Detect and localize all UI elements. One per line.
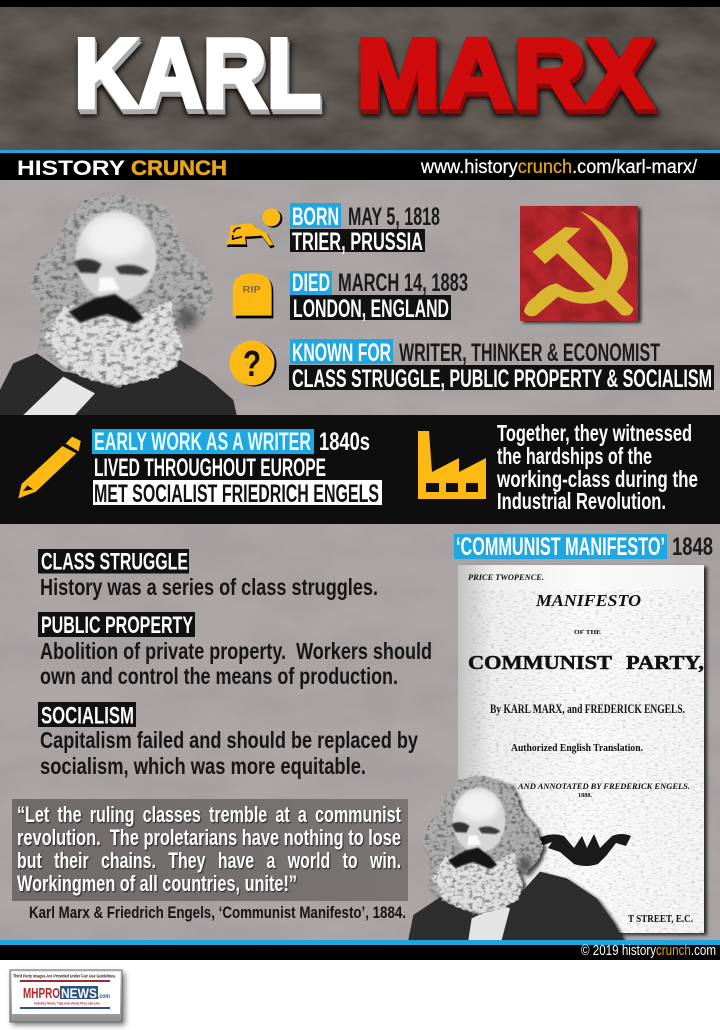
- manifesto document: MANIFESTO: [535, 591, 641, 610]
- portrait: Karl Marx: [0, 194, 237, 415]
- industrial revolution text: [496, 420, 698, 514]
- icon: question mark: ?: [243, 343, 261, 384]
- icon: factory: [418, 431, 486, 499]
- public property block: Abolition of private property. Workers should: [40, 638, 432, 664]
- manifesto document: 1888.: [578, 793, 593, 799]
- born label: MAY 5, 1818: [348, 203, 440, 231]
- title: [74, 18, 653, 128]
- black band: [0, 415, 720, 524]
- born label: BORN: [292, 203, 339, 231]
- death place: LONDON, ENGLAND: [293, 295, 449, 323]
- MHProNews logo badge: MHPRO: [23, 985, 60, 1002]
- engels line: MET SOCIALIST FRIEDRICH ENGELS: [94, 480, 379, 508]
- died label: DIED: [292, 269, 330, 297]
- born label: [290, 203, 440, 231]
- MHProNews logo badge: .com: [98, 994, 110, 1000]
- public property block: [38, 612, 432, 689]
- manifesto document: COMMUNIST PARTY,: [468, 652, 704, 674]
- socialism block: Capitalism failed and should be replaced by: [40, 727, 418, 753]
- MHProNews logo badge: Industry News, Tips and Views Pros can Use: [34, 1000, 101, 1006]
- died label: [290, 269, 468, 297]
- birthplace: TRIER, PRUSSIA: [292, 228, 423, 256]
- icon: hammer and sickle flag: [520, 206, 638, 321]
- portrait: Karl Marx over manifesto: [408, 775, 623, 940]
- main grey panel: [0, 180, 720, 415]
- top black strip: [0, 0, 720, 8]
- title: KARL: [74, 18, 321, 128]
- copyright: © 2019 historycrunch.com: [581, 943, 716, 959]
- lower grey panel: [0, 520, 720, 941]
- manifesto document: [458, 565, 704, 933]
- birthplace: [290, 228, 425, 256]
- known for label: KNOWN FOR: [292, 339, 391, 367]
- MHProNews logo badge: [10, 970, 125, 1025]
- manifesto document: PRICE TWOPENCE.: [468, 573, 544, 582]
- socialism block: socialism, which was more equitable.: [40, 753, 366, 779]
- title banner background: [0, 7, 720, 151]
- class struggle block: History was a series of class struggles.: [40, 574, 378, 600]
- public property block: PUBLIC PROPERTY: [41, 612, 193, 639]
- MHProNews logo badge: NEWS: [61, 986, 97, 1001]
- header bar: [0, 150, 720, 180]
- socialism block: SOCIALISM: [41, 702, 134, 730]
- quote box: but their chains. They have a world to win.: [17, 848, 401, 873]
- class struggle block: CLASS STRUGGLE: [41, 548, 188, 576]
- socialism block: [38, 702, 418, 779]
- quote box: revolution. The proletarians have nothing to lose: [17, 825, 401, 850]
- MHProNews logo badge: Third Party Images Are Provided Under Fair Use Guidelines.: [13, 974, 116, 978]
- manifesto document: AND ANNOTATED BY FREDERICK ENGELS.: [517, 781, 690, 791]
- manifesto document: OF THE: [574, 630, 601, 636]
- known for label: [290, 339, 660, 367]
- death place: [290, 295, 451, 323]
- quote box: “Let the ruling classes tremble at a communist: [17, 802, 401, 827]
- engels line: [93, 480, 382, 508]
- class struggle block: [38, 548, 378, 600]
- icon: pencil: [18, 437, 81, 498]
- quote attribution: Karl Marx & Friedrich Engels, ‘Communist Manifesto’, 1884.: [29, 903, 406, 922]
- document ornament: [539, 834, 631, 866]
- icon: crawling baby: [225, 208, 282, 248]
- icon: tombstone: RIP: [243, 284, 261, 294]
- manifesto document: Authorized English Translation.: [511, 743, 643, 754]
- writer label: 1840s: [319, 428, 370, 456]
- died label: MARCH 14, 1883: [338, 269, 468, 297]
- brand: [17, 157, 227, 180]
- title: MARX: [356, 18, 653, 128]
- icon: tombstone: [233, 273, 273, 318]
- quote box: Workingmen of all countries, unite!”: [17, 871, 297, 896]
- icon: question mark: [230, 340, 276, 386]
- brand: CRUNCH: [131, 157, 227, 180]
- brand: HISTORY: [17, 157, 125, 180]
- writer label: EARLY WORK AS A WRITER: [94, 428, 311, 456]
- footer bar: [0, 940, 720, 960]
- public property block: own and control the means of production.: [40, 663, 398, 689]
- europe line: LIVED THROUGHOUT EUROPE: [94, 454, 326, 482]
- quote box: [12, 799, 408, 901]
- site url: www.historycrunch.com/karl-marx/: [420, 157, 698, 178]
- manifesto document: T STREET, E.C.: [628, 914, 693, 925]
- industrial revolution text: the hardships of the: [497, 443, 652, 469]
